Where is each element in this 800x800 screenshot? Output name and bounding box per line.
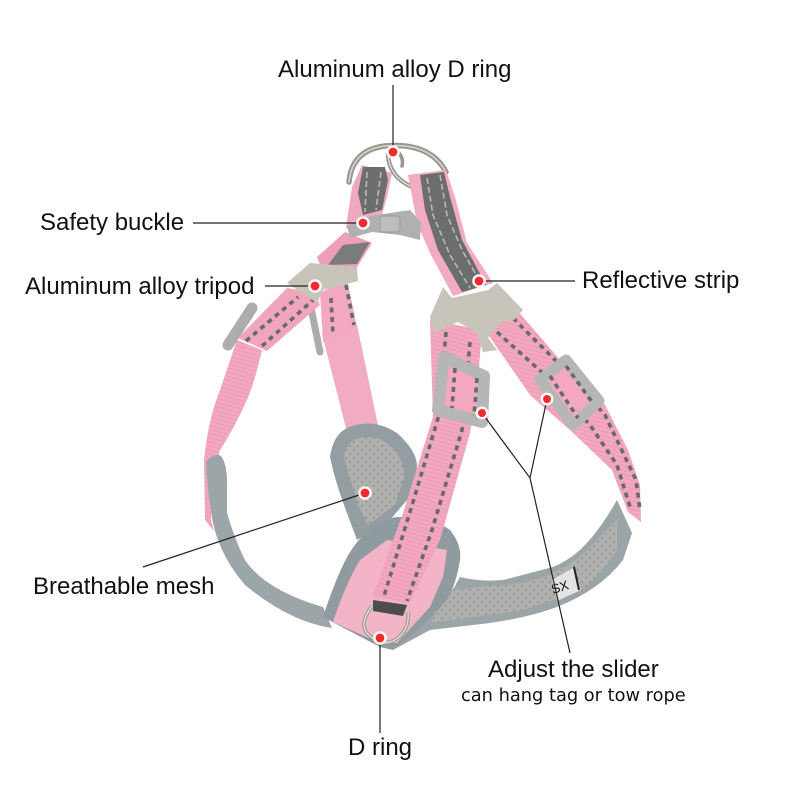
leader line: reflective strip	[479, 280, 575, 282]
leader line: aluminum alloy D ring	[392, 85, 394, 152]
leader line: breathable mesh	[143, 493, 365, 567]
left lower wing slider	[228, 308, 252, 345]
leader line: tripod	[265, 285, 315, 287]
left inner slider	[311, 308, 320, 352]
left padded band	[206, 455, 332, 628]
leader line: safety buckle	[193, 222, 363, 224]
right aluminum tripod	[430, 283, 523, 352]
size label tag	[549, 567, 581, 601]
label: Adjust the slider: Adjust the slider	[488, 656, 659, 683]
left upper strap	[346, 165, 392, 230]
center strap slider	[438, 357, 484, 422]
label: D ring: D ring	[348, 734, 412, 761]
size label tag: SX	[549, 577, 571, 597]
leader line: adjust the slider	[482, 399, 570, 653]
label: can hang tag or tow rope: can hang tag or tow rope	[461, 685, 686, 706]
breathable mesh pad	[330, 424, 417, 540]
right reflective upper strap	[408, 170, 493, 296]
left aluminum tripod	[287, 263, 358, 303]
right strap slider	[540, 360, 599, 425]
center strap	[372, 320, 482, 603]
right strap	[487, 310, 641, 522]
leader line: D ring	[379, 638, 381, 733]
label: Aluminum alloy D ring: Aluminum alloy D ring	[278, 56, 511, 83]
left strap to tripod	[317, 232, 372, 272]
top metal ring	[349, 146, 446, 187]
safety buckle	[347, 210, 421, 240]
center chest panel	[323, 517, 460, 650]
marker dots	[309, 146, 552, 644]
label: Reflective strip: Reflective strip	[582, 267, 739, 294]
left wing strap	[238, 288, 320, 351]
left long strap	[204, 340, 262, 531]
left stitched strap	[320, 279, 357, 342]
label: Aluminum alloy tripod: Aluminum alloy tripod	[25, 273, 254, 300]
label: Safety buckle: Safety buckle	[40, 209, 184, 236]
bottom D ring	[364, 600, 408, 643]
right padded band	[393, 500, 632, 650]
harness illustration	[204, 146, 641, 650]
left vertical strap	[322, 325, 378, 432]
label: Breathable mesh: Breathable mesh	[33, 573, 214, 600]
